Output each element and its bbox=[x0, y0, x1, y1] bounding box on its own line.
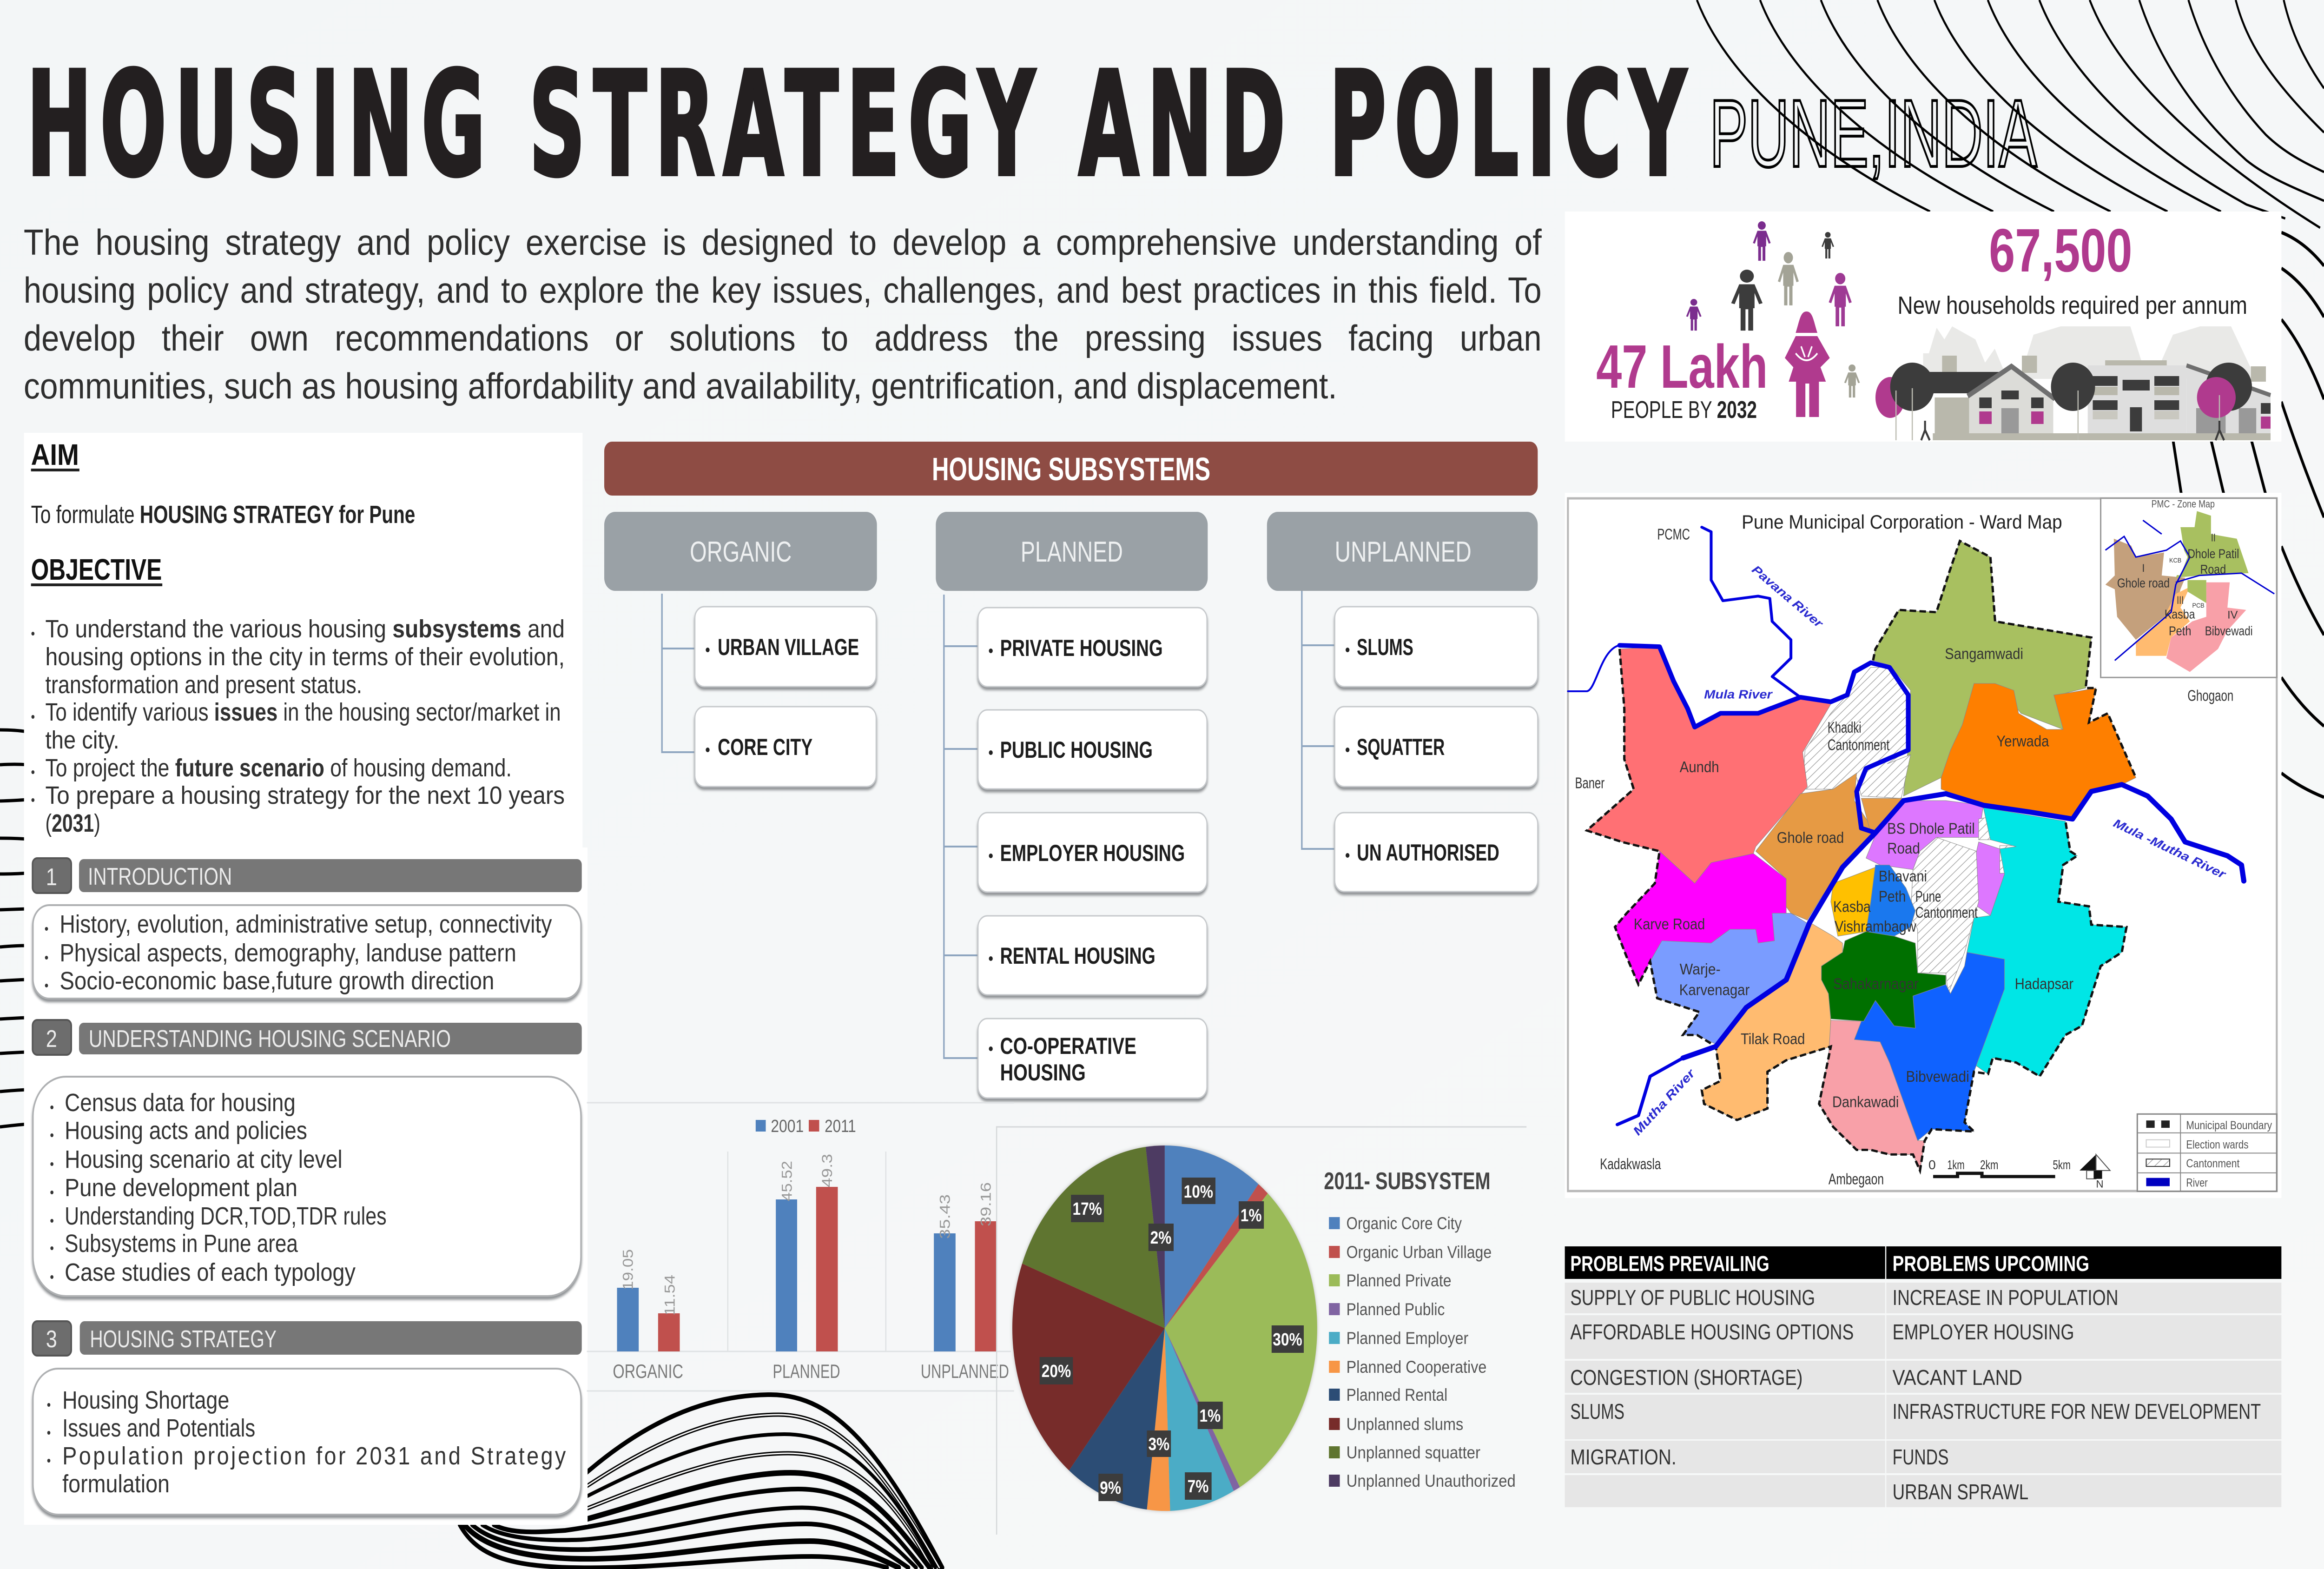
map: place labels: Kasba bbox=[1833, 898, 1871, 915]
map: place labels: Mula River bbox=[1704, 688, 1773, 702]
table rows bbox=[1565, 1283, 2281, 1507]
column: planned: PUBLIC HOUSING bbox=[1000, 736, 1153, 763]
text: aim statement: To formulate HOUSING STRATEGY for Pune bbox=[31, 500, 415, 529]
text box: introduction items: Physical aspects, demography, landuse pattern bbox=[59, 939, 516, 967]
column: planned: PLANNED bbox=[1021, 536, 1123, 568]
table rows: INFRASTRUCTURE FOR NEW DEVELOPMENT bbox=[1893, 1400, 2261, 1423]
pie data labels: 3% bbox=[1148, 1434, 1169, 1454]
pie data labels: 10% bbox=[1184, 1182, 1213, 1202]
map: place labels bbox=[1575, 511, 2233, 1188]
map: place labels: Ambegaon bbox=[1829, 1171, 1884, 1188]
column: organic: URBAN VILLAGE bbox=[718, 634, 859, 660]
bar chart: subsystem share 2001 vs 2011: 11.54 bbox=[662, 1275, 678, 1316]
chart legend: 2011 bbox=[825, 1116, 856, 1136]
section header: 1 Introduction: INTRODUCTION bbox=[88, 863, 232, 890]
pie legend: Planned Private bbox=[1347, 1271, 1452, 1291]
chart legend bbox=[756, 1116, 856, 1136]
list: objectives: To identify various issues in the housing sector/market in bbox=[46, 698, 561, 726]
map: zone inset bbox=[2101, 498, 2277, 677]
map: place labels: Road bbox=[1887, 840, 1920, 857]
column: planned: PRIVATE HOUSING bbox=[1000, 635, 1163, 661]
text box: introduction items: History, evolution, administrative setup, connectivity bbox=[59, 910, 552, 938]
label: people by 2032: PEOPLE BY 2032 bbox=[1611, 397, 1757, 424]
table rows: SLUMS bbox=[1570, 1400, 1624, 1423]
map: place labels: Ghogaon bbox=[2187, 687, 2233, 705]
pie legend: Unplanned slums bbox=[1347, 1415, 1463, 1434]
map: place labels: Ghole road bbox=[1777, 829, 1844, 847]
section header: 2 Understanding housing scenario bbox=[33, 1020, 582, 1055]
section header: 3 Housing strategy bbox=[33, 1321, 582, 1356]
pie chart: 2011 subsystem bbox=[997, 1127, 1526, 1535]
section header: 1 Introduction: 1 bbox=[46, 864, 57, 891]
panel: aim and objective bbox=[24, 433, 582, 847]
list: objectives: (2031) bbox=[46, 809, 100, 837]
table rows: URBAN SPRAWL bbox=[1893, 1480, 2028, 1504]
pie legend: Organic Urban Village bbox=[1347, 1243, 1492, 1262]
map: place labels: Peth bbox=[1879, 888, 1906, 906]
text box: introduction items bbox=[33, 905, 581, 999]
heading: AIM: AIM bbox=[31, 439, 79, 471]
bar chart: subsystem share 2001 vs 2011: UNPLANNED bbox=[921, 1361, 1009, 1383]
map: legend: Election wards bbox=[2186, 1139, 2249, 1151]
pie data labels: 20% bbox=[1042, 1361, 1071, 1381]
table rows: VACANT LAND bbox=[1893, 1366, 2022, 1390]
column: planned: EMPLOYER HOUSING bbox=[1000, 840, 1185, 866]
map: zone inset: IV bbox=[2227, 609, 2238, 622]
heading: housing subsystems: HOUSING SUBSYSTEMS bbox=[932, 451, 1210, 487]
map: scale bar and north arrow bbox=[1928, 1154, 2110, 1190]
map: legend: River bbox=[2186, 1177, 2208, 1189]
bar chart: subsystem share 2001 vs 2011: PLANNED bbox=[773, 1361, 840, 1383]
text box: scenario items: Understanding DCR,TOD,TDR rules bbox=[65, 1202, 387, 1230]
pie data labels: 2% bbox=[1150, 1228, 1171, 1248]
text box: scenario items: Housing acts and policies bbox=[65, 1116, 307, 1145]
map: rivers bbox=[1568, 527, 2244, 1125]
map: place labels: PCMC bbox=[1657, 526, 1690, 543]
map: zone inset: Dhole Patil bbox=[2187, 547, 2239, 561]
map: scale bar and north arrow: 5km bbox=[2053, 1158, 2071, 1172]
panel: Pune ward map bbox=[1565, 493, 2281, 1198]
icon: houses and trees bbox=[1875, 326, 2271, 440]
column: planned: RENTAL HOUSING bbox=[1000, 942, 1155, 969]
stat: 47 Lakh: 47 Lakh bbox=[1596, 332, 1768, 401]
pie legend: Planned Public bbox=[1347, 1300, 1445, 1319]
pie legend: Planned Rental bbox=[1347, 1385, 1447, 1405]
text box: scenario items: Census data for housing bbox=[65, 1088, 296, 1117]
column: unplanned: SQUATTER bbox=[1357, 734, 1445, 760]
map: place labels: Cantonment bbox=[1915, 904, 1978, 921]
map: legend: Cantonment bbox=[2186, 1157, 2239, 1170]
column: unplanned: UNPLANNED bbox=[1335, 536, 1472, 568]
map: place labels: Tilak Road bbox=[1741, 1030, 1805, 1048]
map: zone inset: Peth bbox=[2169, 624, 2191, 638]
pie legend bbox=[1329, 1214, 1516, 1491]
table rows: AFFORDABLE HOUSING OPTIONS bbox=[1570, 1320, 1854, 1344]
text box: strategy items: Housing Shortage bbox=[62, 1386, 229, 1414]
bar chart: subsystem share 2001 vs 2011 bbox=[587, 1103, 1014, 1391]
subtitle: Pune, India: PUNE,INDIA bbox=[1710, 80, 2037, 187]
bar chart: subsystem share 2001 vs 2011: 49.3 bbox=[819, 1154, 835, 1187]
map: place labels: Hadapsar bbox=[2015, 975, 2073, 993]
table header: PROBLEMS PREVAILING bbox=[1570, 1252, 1769, 1276]
list: objectives: housing options in the city in terms of their evolution, bbox=[46, 642, 565, 671]
pie legend: Planned Cooperative bbox=[1347, 1357, 1486, 1377]
panel: housing subsystems tree bbox=[604, 442, 1538, 1098]
text box: strategy items: Population projection for 2031 and Strategy bbox=[62, 1442, 568, 1470]
map: place labels: Pune bbox=[1915, 888, 1941, 906]
text box: scenario items bbox=[33, 1077, 581, 1296]
map: place labels: BS Dhole Patil bbox=[1887, 820, 1975, 837]
map: place labels: Mula -Mutha River bbox=[2111, 816, 2229, 881]
map: place labels: Sahakarnagar bbox=[1833, 975, 1919, 993]
pie legend: Unplanned Unauthorized bbox=[1347, 1471, 1516, 1491]
map: zone inset: KCB bbox=[2169, 556, 2181, 564]
map: zone inset: III bbox=[2177, 594, 2184, 607]
table: problems prevailing and upcoming bbox=[1565, 1246, 2281, 1507]
column: unplanned: UN AUTHORISED bbox=[1357, 839, 1499, 866]
map: place labels: Aundh bbox=[1680, 758, 1719, 776]
text box: strategy items: Issues and Potentials bbox=[62, 1414, 255, 1442]
column: unplanned bbox=[1267, 512, 1538, 892]
map: zone inset: Kasba bbox=[2165, 607, 2195, 622]
map: scale bar and north arrow: 0 bbox=[1928, 1158, 1936, 1172]
text box: scenario items: Case studies of each typology bbox=[65, 1258, 356, 1286]
list: objectives bbox=[32, 615, 565, 837]
map: zone inset: I bbox=[2142, 562, 2145, 575]
table rows: CONGESTION (SHORTAGE) bbox=[1570, 1366, 1802, 1390]
table header bbox=[1565, 1246, 2281, 1279]
section header: 2 Understanding housing scenario: UNDERSTANDING HOUSING SCENARIO bbox=[89, 1026, 451, 1053]
intro paragraph: communities, such as housing affordability and availability, gentrification, and displacement. bbox=[24, 366, 1337, 406]
text box: strategy items: formulation bbox=[62, 1470, 170, 1498]
panel: population and households infographic bbox=[1565, 212, 2281, 442]
map: zone inset: II bbox=[2211, 532, 2216, 544]
pie data labels: 9% bbox=[1100, 1478, 1121, 1498]
table header: PROBLEMS UPCOMING bbox=[1893, 1252, 2089, 1276]
map: place labels: Bibvewadi bbox=[1906, 1068, 1969, 1086]
list: objectives: To understand the various housing subsystems and bbox=[46, 615, 565, 643]
text box: scenario items: Housing scenario at city level bbox=[65, 1145, 343, 1173]
map: place labels: Sangamwadi bbox=[1945, 645, 2023, 663]
pie slices bbox=[1012, 1145, 1317, 1511]
stat: 67,500: 67,500 bbox=[1989, 216, 2133, 285]
column: planned: HOUSING bbox=[1000, 1059, 1086, 1086]
text box: scenario items: Subsystems in Pune area bbox=[65, 1229, 298, 1258]
map: place labels: Karve Road bbox=[1634, 915, 1705, 933]
map: place labels: Mutha River bbox=[1630, 1066, 1698, 1138]
table rows: INCREASE IN POPULATION bbox=[1893, 1286, 2119, 1310]
bar chart: subsystem share 2001 vs 2011: ORGANIC bbox=[613, 1361, 683, 1383]
text box: scenario items: Pune development plan bbox=[65, 1173, 297, 1202]
map: zone inset: Bibvewadi bbox=[2205, 624, 2253, 638]
heading: housing subsystems bbox=[604, 442, 1538, 496]
intro paragraph: housing policy and strategy, and to explore the key issues, challenges, and best practices in this field. To bbox=[24, 270, 1542, 311]
map: place labels: Pune Municipal Corporation - Ward Map bbox=[1742, 511, 2062, 533]
column: planned bbox=[936, 512, 1208, 1098]
map: place labels: Karvenagar bbox=[1679, 981, 1750, 999]
column: organic bbox=[604, 512, 877, 787]
pie data labels: 7% bbox=[1188, 1476, 1208, 1496]
pie data labels: 1% bbox=[1199, 1406, 1221, 1426]
column: organic: ORGANIC bbox=[690, 536, 792, 568]
map: place labels: Cantonment bbox=[1828, 736, 1890, 754]
intro paragraph: The housing strategy and policy exercise is designed to develop a comprehensive understanding of bbox=[24, 222, 1542, 263]
map: zone inset: PCB bbox=[2192, 602, 2205, 609]
map: scale bar and north arrow: 2km bbox=[1980, 1158, 1998, 1172]
map: legend: Municipal Boundary bbox=[2186, 1119, 2272, 1132]
map: zone inset: Ghole road bbox=[2117, 576, 2170, 590]
bar chart: subsystem share 2001 vs 2011: 45.52 bbox=[779, 1161, 795, 1201]
pie data labels bbox=[1040, 1178, 1304, 1501]
table rows: MIGRATION. bbox=[1570, 1445, 1677, 1469]
chart legend: 2001 bbox=[771, 1116, 804, 1136]
table rows: EMPLOYER HOUSING bbox=[1893, 1320, 2074, 1344]
map: scale bar and north arrow: 1km bbox=[1947, 1158, 1965, 1172]
pie legend: Unplanned squatter bbox=[1347, 1443, 1480, 1463]
map: scale bar and north arrow: N bbox=[2096, 1178, 2103, 1190]
map: ward polygons bbox=[1587, 541, 2136, 1171]
column: planned: CO-OPERATIVE bbox=[1000, 1033, 1136, 1059]
map: place labels: Dankawadi bbox=[1832, 1093, 1899, 1111]
table rows: SUPPLY OF PUBLIC HOUSING bbox=[1570, 1286, 1815, 1310]
section header: 2 Understanding housing scenario: 2 bbox=[46, 1026, 57, 1053]
pie data labels: 1% bbox=[1241, 1205, 1262, 1225]
map: legend bbox=[2137, 1114, 2277, 1191]
column: organic: CORE CITY bbox=[718, 734, 812, 760]
title: HOUSING STRATEGY AND POLICY bbox=[27, 41, 1695, 208]
bar chart: subsystem share 2001 vs 2011: 19.05 bbox=[620, 1249, 636, 1290]
list: objectives: transformation and present status. bbox=[46, 670, 362, 699]
bar chart: subsystem share 2001 vs 2011: 39.16 bbox=[978, 1182, 994, 1226]
column: unplanned: SLUMS bbox=[1357, 634, 1413, 660]
map: zone inset: PMC - Zone Map bbox=[2152, 498, 2215, 510]
map: place labels: Vishrambagw bbox=[1835, 918, 1916, 935]
map: place labels: Yerwada bbox=[1996, 733, 2049, 750]
bar chart: subsystem share 2001 vs 2011: 35.43 bbox=[937, 1194, 953, 1239]
panel: methodology sections bbox=[24, 847, 588, 1525]
intro paragraph: develop their own recommendations or solutions to address the pressing issues facing urban bbox=[24, 318, 1542, 358]
list: objectives: the city. bbox=[46, 726, 119, 754]
text box: strategy items bbox=[33, 1369, 581, 1515]
pie legend: Organic Core City bbox=[1347, 1214, 1462, 1233]
map: zone inset: Road bbox=[2200, 562, 2226, 576]
list: objectives: To prepare a housing strategy for the next 10 years bbox=[46, 781, 565, 809]
section header: 3 Housing strategy: HOUSING STRATEGY bbox=[90, 1326, 277, 1353]
pie data labels: 30% bbox=[1273, 1330, 1302, 1350]
pie title: 2011- SUBSYSTEM bbox=[1324, 1168, 1491, 1195]
map: place labels: Khadki bbox=[1828, 719, 1862, 736]
label: new households: New households required per annum bbox=[1897, 291, 2247, 319]
map: municipal boundary bbox=[1587, 541, 2136, 1171]
table rows: FUNDS bbox=[1893, 1445, 1949, 1469]
text box: introduction items: Socio-economic base,future growth direction bbox=[59, 967, 494, 995]
map: place labels: Kadakwasla bbox=[1600, 1155, 1661, 1173]
section header: 1 Introduction bbox=[33, 858, 582, 893]
intro paragraph bbox=[24, 222, 1542, 406]
map: place labels: Bhavani bbox=[1879, 867, 1927, 885]
pie legend: Planned Employer bbox=[1347, 1329, 1468, 1348]
list: objectives: To project the future scenario of housing demand. bbox=[46, 754, 512, 782]
icon: group of people bbox=[1686, 221, 1860, 417]
pie data labels: 17% bbox=[1072, 1199, 1102, 1219]
map: place labels: Warje- bbox=[1680, 960, 1721, 978]
section header: 3 Housing strategy: 3 bbox=[46, 1326, 57, 1353]
heading: OBJECTIVE: OBJECTIVE bbox=[31, 554, 162, 586]
map: place labels: Pavana River bbox=[1749, 563, 1827, 631]
map: place labels: Baner bbox=[1575, 775, 1604, 792]
